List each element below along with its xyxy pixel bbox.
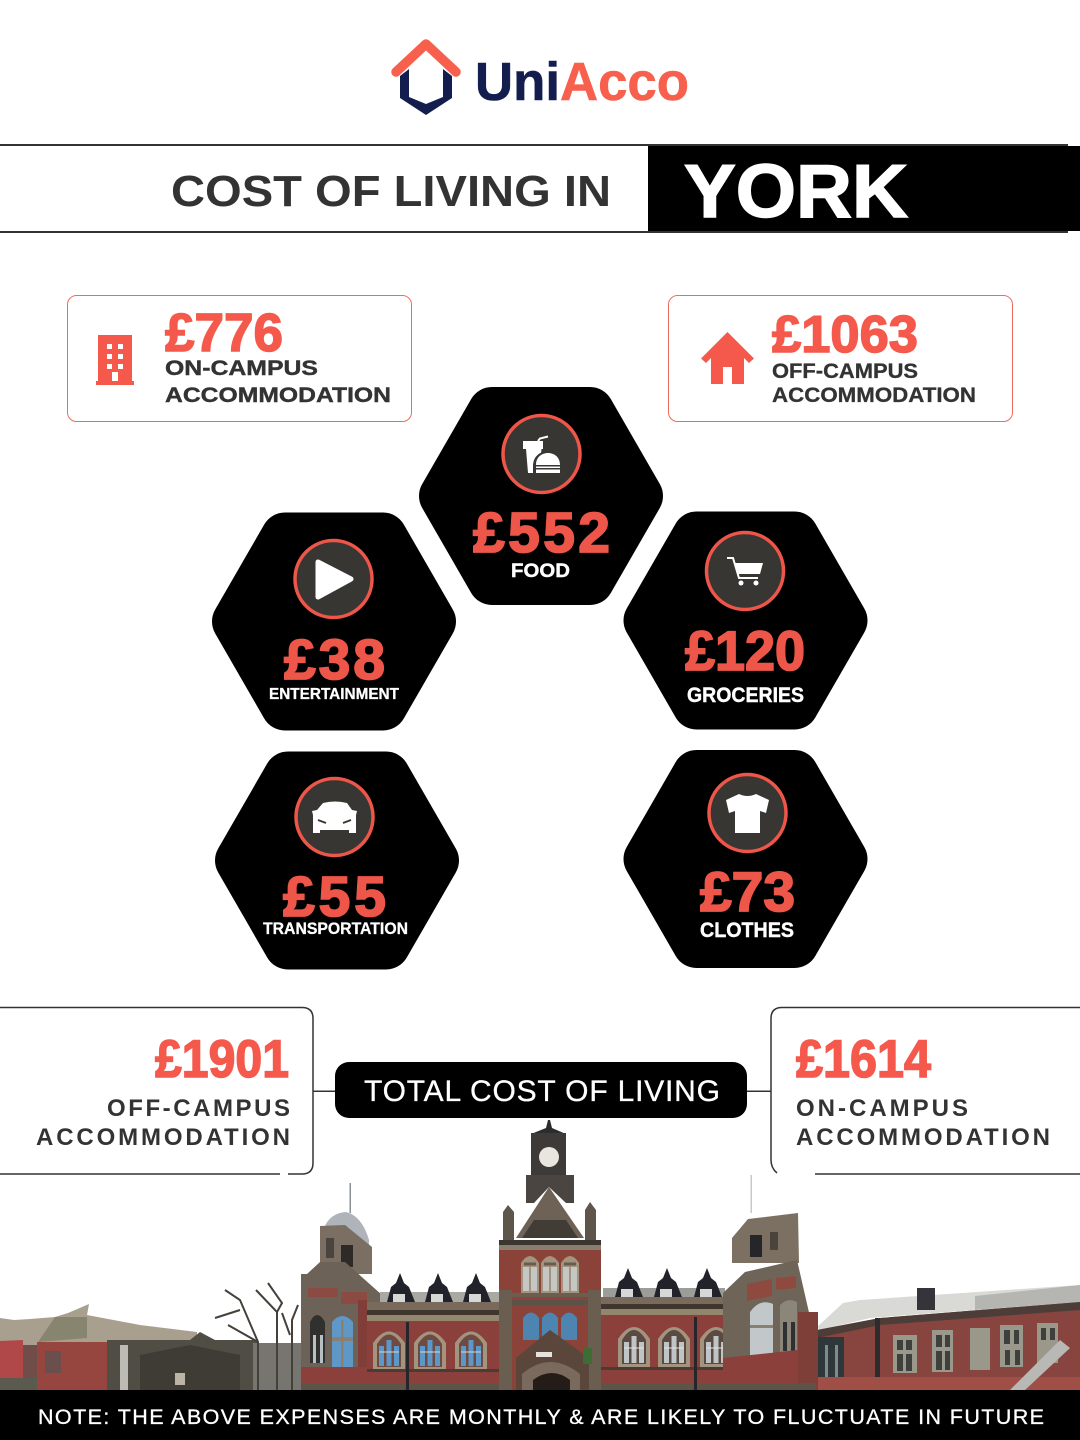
- hexagon: entertainment: [236, 536, 432, 706]
- title: city panel: [648, 146, 1080, 233]
- label: FOOD: [511, 560, 570, 582]
- icon: car: [296, 778, 373, 856]
- hexagon: clothes: [648, 774, 844, 944]
- icon: play: [295, 540, 372, 618]
- label: ACCOMMODATION: [165, 383, 391, 407]
- icon: food: [503, 416, 580, 492]
- panel: off-campus accommodation: [668, 296, 1012, 422]
- footer note: NOTE: THE ABOVE EXPENSES ARE MONTHLY & ARE LIKELY TO FLUCTUATE IN FUTURE: [38, 1405, 1044, 1429]
- trees: [215, 1283, 298, 1390]
- label: ACCOMMODATION: [36, 1124, 290, 1151]
- clock face: [539, 1147, 559, 1167]
- title: cost of living in: COST OF LIVING IN: [171, 167, 611, 216]
- central block: [499, 1240, 601, 1390]
- left wing: [367, 1273, 500, 1390]
- hexagon: groceries: [648, 532, 844, 707]
- amount: £1901: [155, 1030, 289, 1089]
- title band: [0, 144, 1080, 233]
- label: OFF-CAMPUS: [107, 1095, 290, 1122]
- logo wordmark: UniAcco: [475, 52, 689, 112]
- label: CLOTHES: [700, 919, 794, 942]
- total cost of living pill: TOTAL COST OF LIVING: [364, 1075, 720, 1108]
- amount: £1614: [796, 1030, 931, 1089]
- amount: £55: [283, 865, 386, 929]
- left outbuilding: [0, 1283, 301, 1390]
- right wing: [601, 1268, 732, 1390]
- label: ENTERTAINMENT: [269, 686, 399, 703]
- icon: house logo: [396, 44, 456, 115]
- amount: £1063: [772, 306, 918, 364]
- right tower: [723, 1175, 818, 1390]
- title: city panel: YORK: [684, 149, 908, 233]
- hexagon: food: [443, 411, 639, 582]
- amount: £776: [165, 303, 283, 363]
- icon: shirt: [709, 774, 786, 852]
- label: TRANSPORTATION: [263, 919, 408, 938]
- building photo: York: [0, 1120, 1080, 1390]
- hexagon: transportation: [239, 776, 435, 946]
- clock tower: [503, 1120, 596, 1240]
- left tower: [301, 1183, 382, 1390]
- icon: house: [701, 332, 754, 384]
- label: OFF-CAMPUS: [772, 360, 918, 383]
- amount: £38: [284, 628, 385, 692]
- label: GROCERIES: [687, 684, 804, 707]
- panel: off-campus total: [0, 1008, 313, 1174]
- footer note: [0, 1390, 1080, 1440]
- icon: building: [96, 335, 134, 385]
- amount: £120: [685, 619, 805, 682]
- label: ACCOMMODATION: [796, 1124, 1050, 1151]
- icon: cart: [706, 532, 784, 610]
- total cost of living pill: [313, 1062, 771, 1118]
- label: ON-CAMPUS: [796, 1095, 968, 1122]
- amount: £552: [473, 501, 610, 565]
- logo: UniAcco: [396, 44, 689, 115]
- amount: £73: [700, 860, 795, 923]
- right outbuilding: [817, 1285, 1080, 1390]
- label: ACCOMMODATION: [772, 384, 976, 407]
- panel: on-campus accommodation: [68, 296, 412, 422]
- panel: on-campus total: [771, 1008, 1080, 1174]
- label: ON-CAMPUS: [165, 356, 318, 380]
